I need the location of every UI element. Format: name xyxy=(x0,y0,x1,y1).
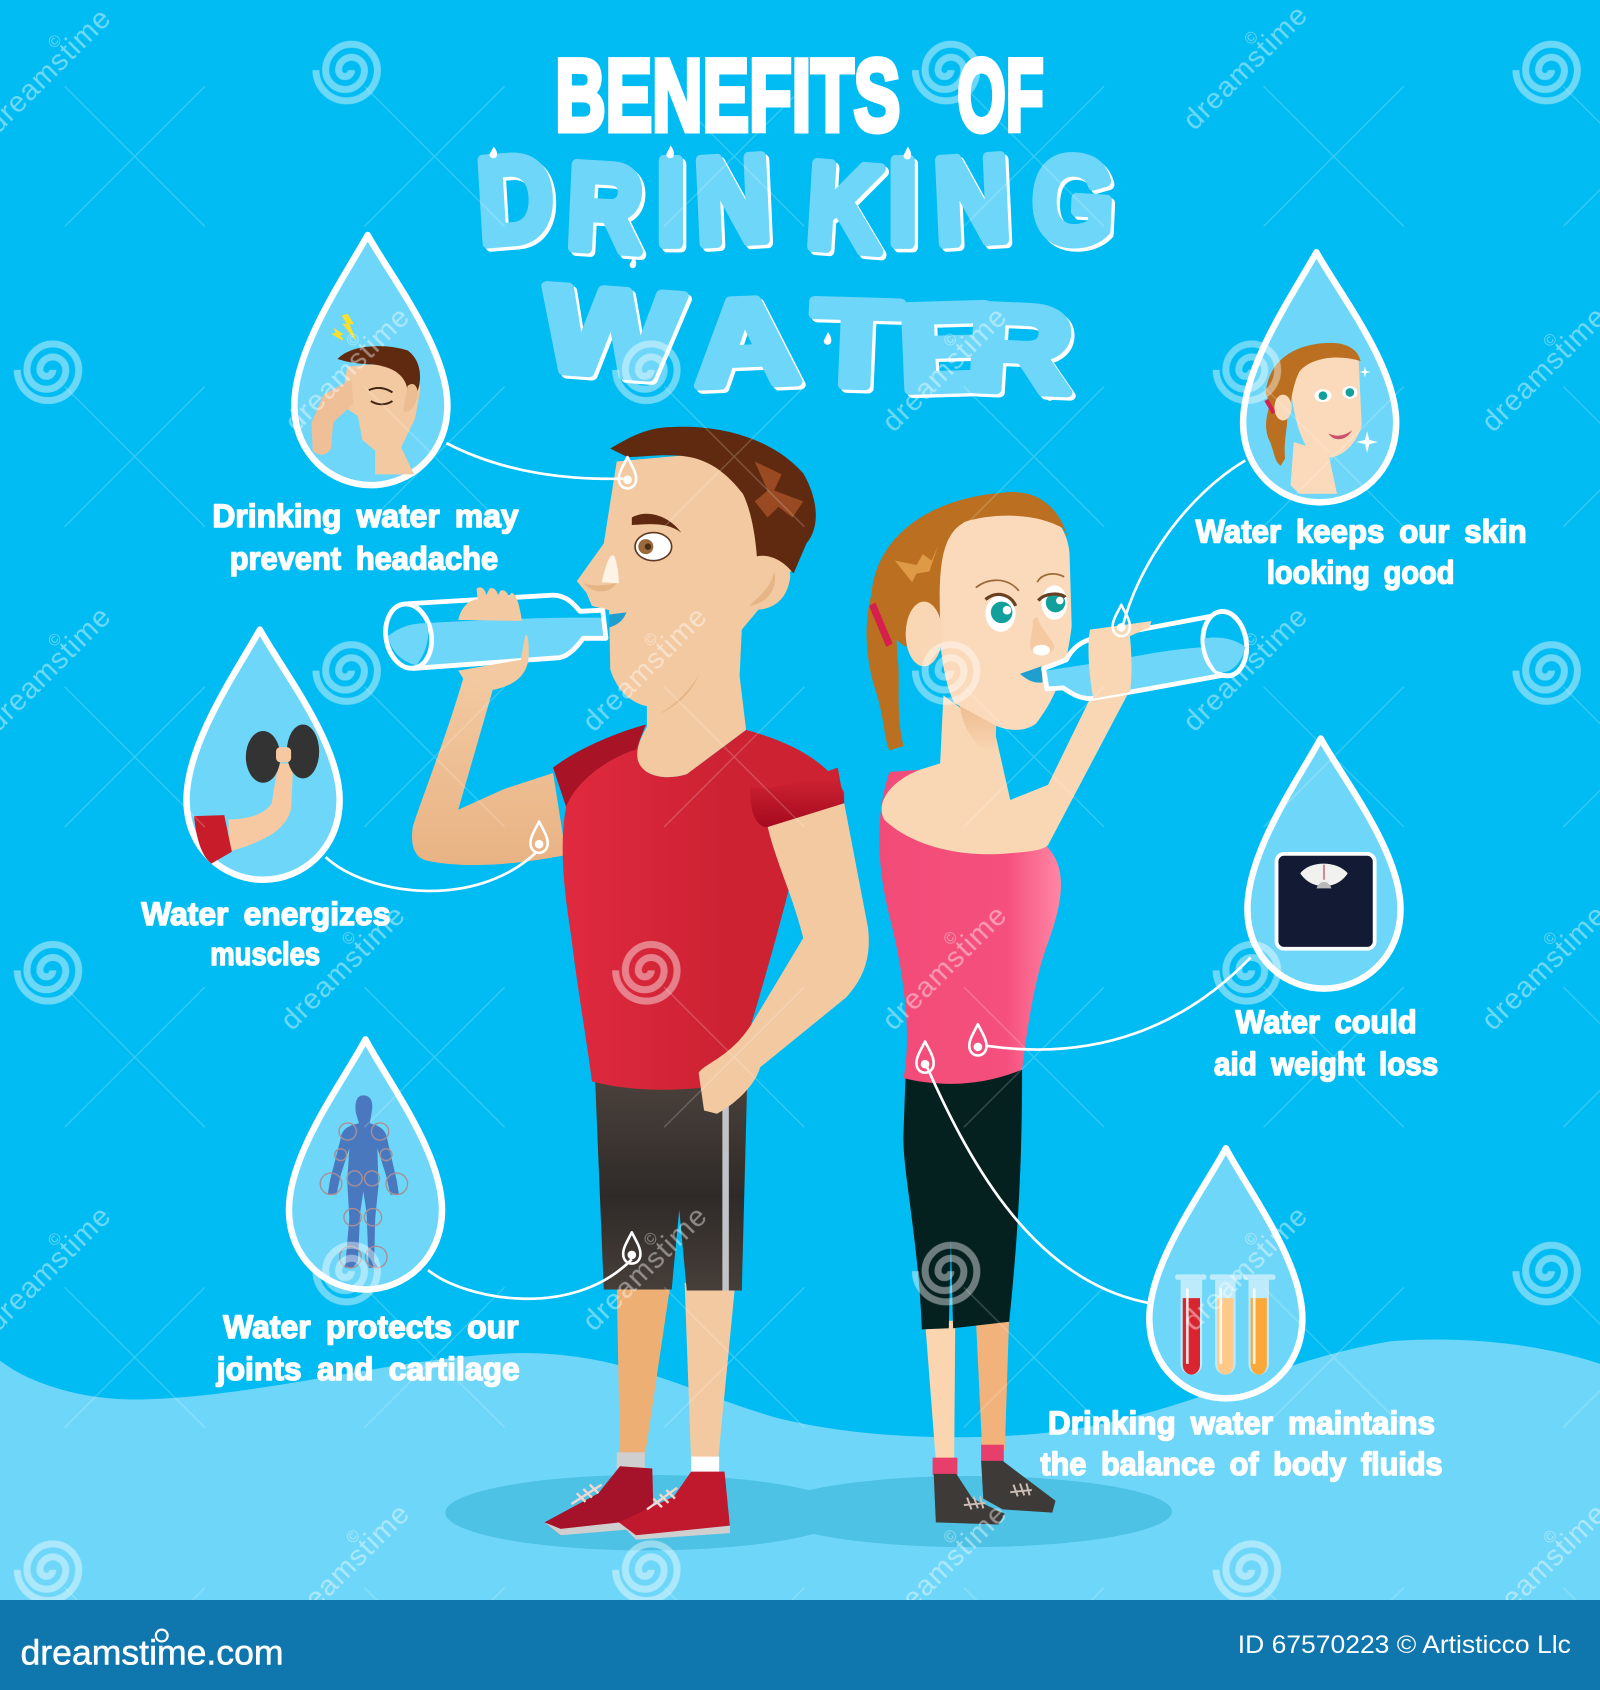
text: fluids xyxy=(1040,1405,1443,1482)
woman hair highlight and hairband xyxy=(869,546,938,647)
man ear xyxy=(747,554,790,610)
text: muscles xyxy=(141,896,390,972)
watermark text: © xyxy=(1540,927,1562,949)
watermark text: © xyxy=(641,1228,663,1250)
watermark text: © xyxy=(940,329,962,351)
icon: test tubes xyxy=(1175,1274,1275,1375)
connector lines xyxy=(326,443,1251,1303)
watermark text: dreamstime xyxy=(876,1497,1014,1635)
man bottle xyxy=(381,595,606,672)
watermark text: dreamstime xyxy=(576,1200,714,1338)
watermark text: © xyxy=(44,1228,66,1250)
text: skin xyxy=(1196,513,1527,590)
watermark text: dreamstime xyxy=(275,899,412,1037)
icon: man with headache xyxy=(312,315,420,474)
text: headache xyxy=(212,498,519,576)
text: joints: joints and cartilage xyxy=(216,1351,520,1387)
text: skin: looking good xyxy=(1267,554,1454,590)
man right arm xyxy=(699,803,869,1114)
watermark text: © xyxy=(343,1526,365,1548)
title: drinking: DRINKING xyxy=(474,128,1117,278)
panel: weight drop xyxy=(1247,739,1401,989)
watermark text: dreamstime xyxy=(576,600,714,738)
woman neck shadow xyxy=(960,703,996,755)
watermark text: © xyxy=(940,927,962,949)
watermark text: © xyxy=(940,1526,962,1548)
title: benefits of: BENEFITS xyxy=(555,37,900,152)
woman eyes and brows xyxy=(976,574,1067,656)
text: joints xyxy=(216,1309,520,1387)
watermark text: © xyxy=(1540,329,1562,351)
watermark text: dreamstime xyxy=(1177,600,1315,738)
icon: woman face with sparkles xyxy=(1264,343,1378,494)
watermark text: dreamstime xyxy=(279,1497,417,1635)
woman figure xyxy=(867,492,1251,1525)
watermark text: © xyxy=(1540,1526,1562,1548)
man shorts xyxy=(595,1080,747,1291)
woman water stream xyxy=(1020,666,1043,683)
panel: headache drop xyxy=(294,235,447,485)
text: weight: aid weight loss xyxy=(1214,1046,1438,1082)
woman hair xyxy=(871,492,1068,647)
title droplets xyxy=(489,146,1053,401)
man eye and brow xyxy=(583,514,681,591)
title: water: WATER xyxy=(535,260,1076,419)
woman hand xyxy=(1088,621,1151,699)
icon: bathroom scale xyxy=(1277,854,1375,949)
title: water: WATER xyxy=(539,264,1080,422)
title: drinking: DRINKING xyxy=(477,132,1120,281)
body marker drops xyxy=(530,457,1130,1264)
watermark text: dreamstime xyxy=(279,301,417,438)
woman legs xyxy=(925,1315,1009,1461)
man water stream xyxy=(609,612,626,627)
footer bar xyxy=(0,1600,1600,1690)
woman neck and arm xyxy=(882,690,1130,854)
text: skin: Water keeps our skin xyxy=(1196,513,1527,549)
footer logo: dreamstime.com xyxy=(20,1633,284,1673)
man shoes xyxy=(544,1466,730,1540)
watermark text: © xyxy=(44,30,66,52)
watermark text: dreamstime xyxy=(876,899,1014,1037)
icon: body silhouette with joints xyxy=(320,1095,408,1268)
woman head xyxy=(939,505,1072,730)
footer credit: ID 67570223 © Artisticco Llc xyxy=(1238,1632,1571,1659)
panel: skin drop xyxy=(1243,252,1396,502)
panel: joints drop xyxy=(289,1039,442,1289)
watermark text: © xyxy=(1241,629,1263,651)
title: benefits of: OF xyxy=(957,37,1044,152)
man neck and head xyxy=(577,453,792,777)
watermark text: dreamstime xyxy=(876,301,1014,438)
man legs xyxy=(617,1283,735,1461)
woman leggings xyxy=(903,1067,1022,1329)
watermark text: © xyxy=(641,629,663,651)
watermark text: dreamstime xyxy=(1177,1200,1315,1338)
woman socks xyxy=(933,1445,1004,1475)
text: fluids: Drinking water maintains xyxy=(1048,1405,1435,1441)
man figure xyxy=(381,427,869,1540)
text: muscles: Water energizes xyxy=(141,896,390,932)
man hand xyxy=(458,587,529,690)
watermark text: © xyxy=(343,329,365,351)
woman shoes xyxy=(934,1461,1056,1525)
man shirt xyxy=(553,725,844,1090)
woman bottle xyxy=(1044,609,1251,699)
text: fluids: the balance of body fluids xyxy=(1040,1446,1443,1482)
watermark text: © xyxy=(339,927,361,949)
man hair xyxy=(610,427,816,574)
man hair highlight xyxy=(755,461,803,518)
text: weight: Water could xyxy=(1236,1004,1417,1040)
text: headache: Drinking water may xyxy=(212,498,519,534)
text: joints: Water protects our xyxy=(223,1309,519,1345)
text: muscles: muscles xyxy=(210,936,320,972)
floor shadows xyxy=(445,1475,1172,1550)
watermark text: © xyxy=(44,629,66,651)
text: weight xyxy=(1214,1004,1438,1082)
man left arm xyxy=(412,677,566,865)
watermark text: © xyxy=(1241,1228,1263,1250)
woman ear xyxy=(906,602,942,666)
man neck crease xyxy=(660,675,699,714)
text: headache: prevent headache xyxy=(230,540,498,576)
icon: arm with dumbbell xyxy=(194,725,319,864)
ground wave xyxy=(0,1340,1600,1606)
man socks xyxy=(617,1452,719,1473)
watermark text: © xyxy=(1241,27,1263,49)
woman top xyxy=(879,770,1061,1084)
watermark text: dreamstime xyxy=(1177,0,1315,136)
panel: muscles drop xyxy=(187,630,340,880)
woman ponytail xyxy=(867,582,904,750)
panel: fluids drop xyxy=(1149,1148,1302,1398)
